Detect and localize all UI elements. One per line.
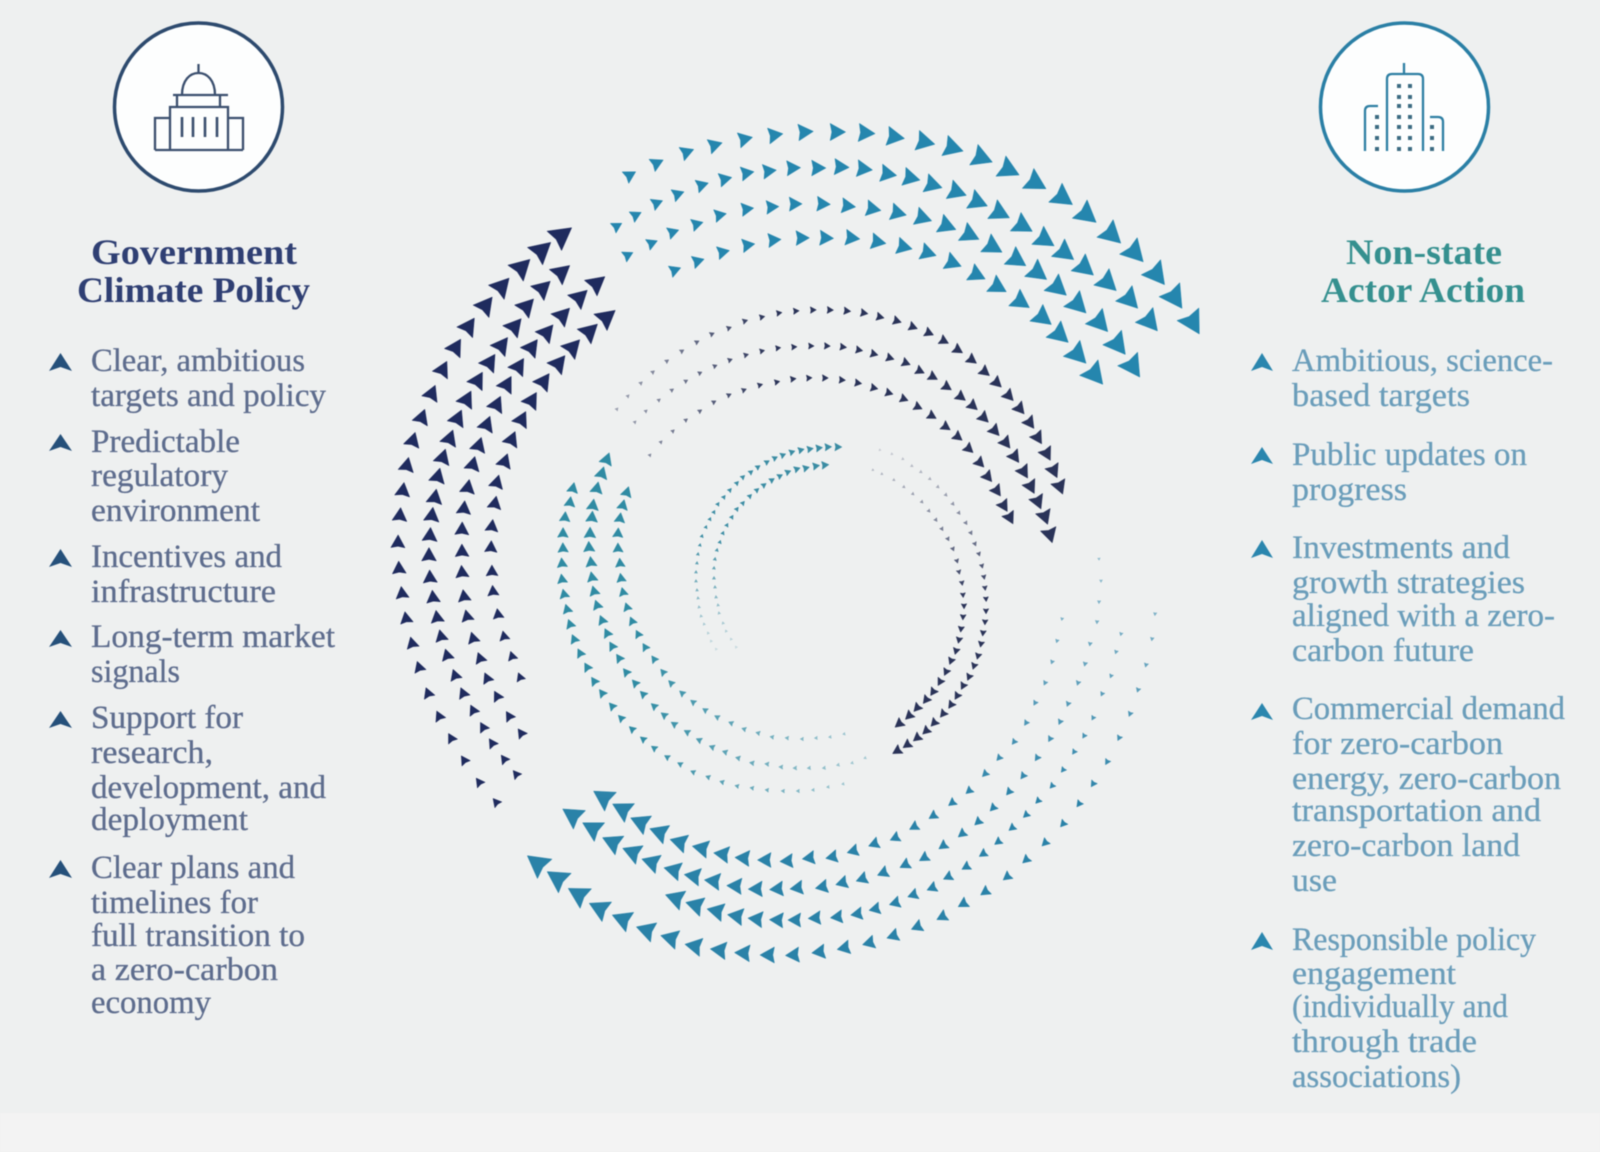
list text: use: [1292, 863, 1337, 899]
heading: Non-state Actor Action: [1321, 232, 1525, 310]
heading: Government Climate Policy: Government: [91, 232, 297, 272]
list text: Clear, ambitious: [91, 343, 305, 379]
list text: associations): [1292, 1059, 1461, 1095]
list text: [91, 343, 335, 1021]
icon: capitol building in circle: [114, 23, 282, 191]
list text: timelines for: [91, 885, 258, 921]
arrow band: inner-left teal, three rows: [556, 451, 866, 793]
list text: zero-carbon land: [1292, 828, 1521, 864]
bullet icons: [49, 353, 72, 878]
list text: through trade: [1292, 1024, 1477, 1060]
list text: Long-term market: [91, 619, 335, 655]
list text: for zero-carbon: [1292, 726, 1503, 762]
bullet list: government policy items: [49, 343, 335, 1021]
list text: [1292, 343, 1565, 1095]
list text: Ambitious, science-: [1292, 343, 1553, 379]
list text: deployment: [91, 802, 248, 838]
arrow band: inner right navy ring, two rows: [872, 449, 989, 758]
list text: growth strategies: [1292, 565, 1525, 601]
list text: economy: [91, 985, 211, 1021]
heading: Government Climate Policy: [77, 232, 310, 310]
list text: Incentives and: [91, 539, 282, 575]
heading: Non-state Actor Action: Non-state: [1346, 232, 1502, 272]
list text: Commercial demand: [1292, 691, 1565, 727]
list text: Predictable: [91, 424, 240, 460]
list text: infrastructure: [91, 574, 276, 610]
list text: development, and: [91, 770, 327, 806]
arrow band: left navy, four rows: [391, 218, 622, 808]
list text: Responsible policy: [1292, 922, 1536, 958]
list text: based targets: [1292, 378, 1470, 414]
icon: city buildings in circle: [1320, 23, 1488, 191]
list text: full transition to: [91, 918, 305, 954]
list text: environment: [91, 493, 260, 529]
chart: spiral of arrows: [391, 123, 1210, 963]
heading: Non-state Actor Action: Actor Action: [1321, 270, 1525, 310]
list text: regulatory: [91, 458, 229, 494]
list text: energy, zero-carbon: [1292, 761, 1561, 797]
list text: Support for: [91, 700, 243, 736]
list text: research,: [91, 735, 213, 771]
list text: transportation and: [1292, 793, 1542, 829]
panel: non-state actor action: [1251, 23, 1565, 1095]
list text: progress: [1292, 472, 1407, 508]
arrow band: top right blue, four rows: [610, 123, 1210, 392]
list text: Investments and: [1292, 530, 1511, 566]
heading: Government Climate Policy: Climate Policy: [77, 270, 310, 310]
arrow band: upper inner navy, three rows: [615, 307, 1070, 545]
list text: engagement: [1292, 956, 1456, 992]
list text: carbon future: [1292, 633, 1474, 669]
list text: Clear plans and: [91, 850, 295, 886]
list text: (individually and: [1292, 989, 1508, 1025]
list text: a zero-carbon: [91, 952, 278, 988]
list text: targets and policy: [91, 378, 326, 414]
arrow band: innermost teal ring, two rows: [695, 443, 842, 650]
list text: aligned with a zero-: [1292, 598, 1555, 634]
arrow band: bottom blue, four rows: [520, 558, 1157, 963]
bullet icons: [1251, 353, 1273, 950]
panel: government climate policy: [49, 23, 335, 1021]
list text: signals: [91, 654, 180, 690]
list text: Public updates on: [1292, 437, 1527, 473]
bullet list: non-state actor items: [1251, 343, 1565, 1095]
